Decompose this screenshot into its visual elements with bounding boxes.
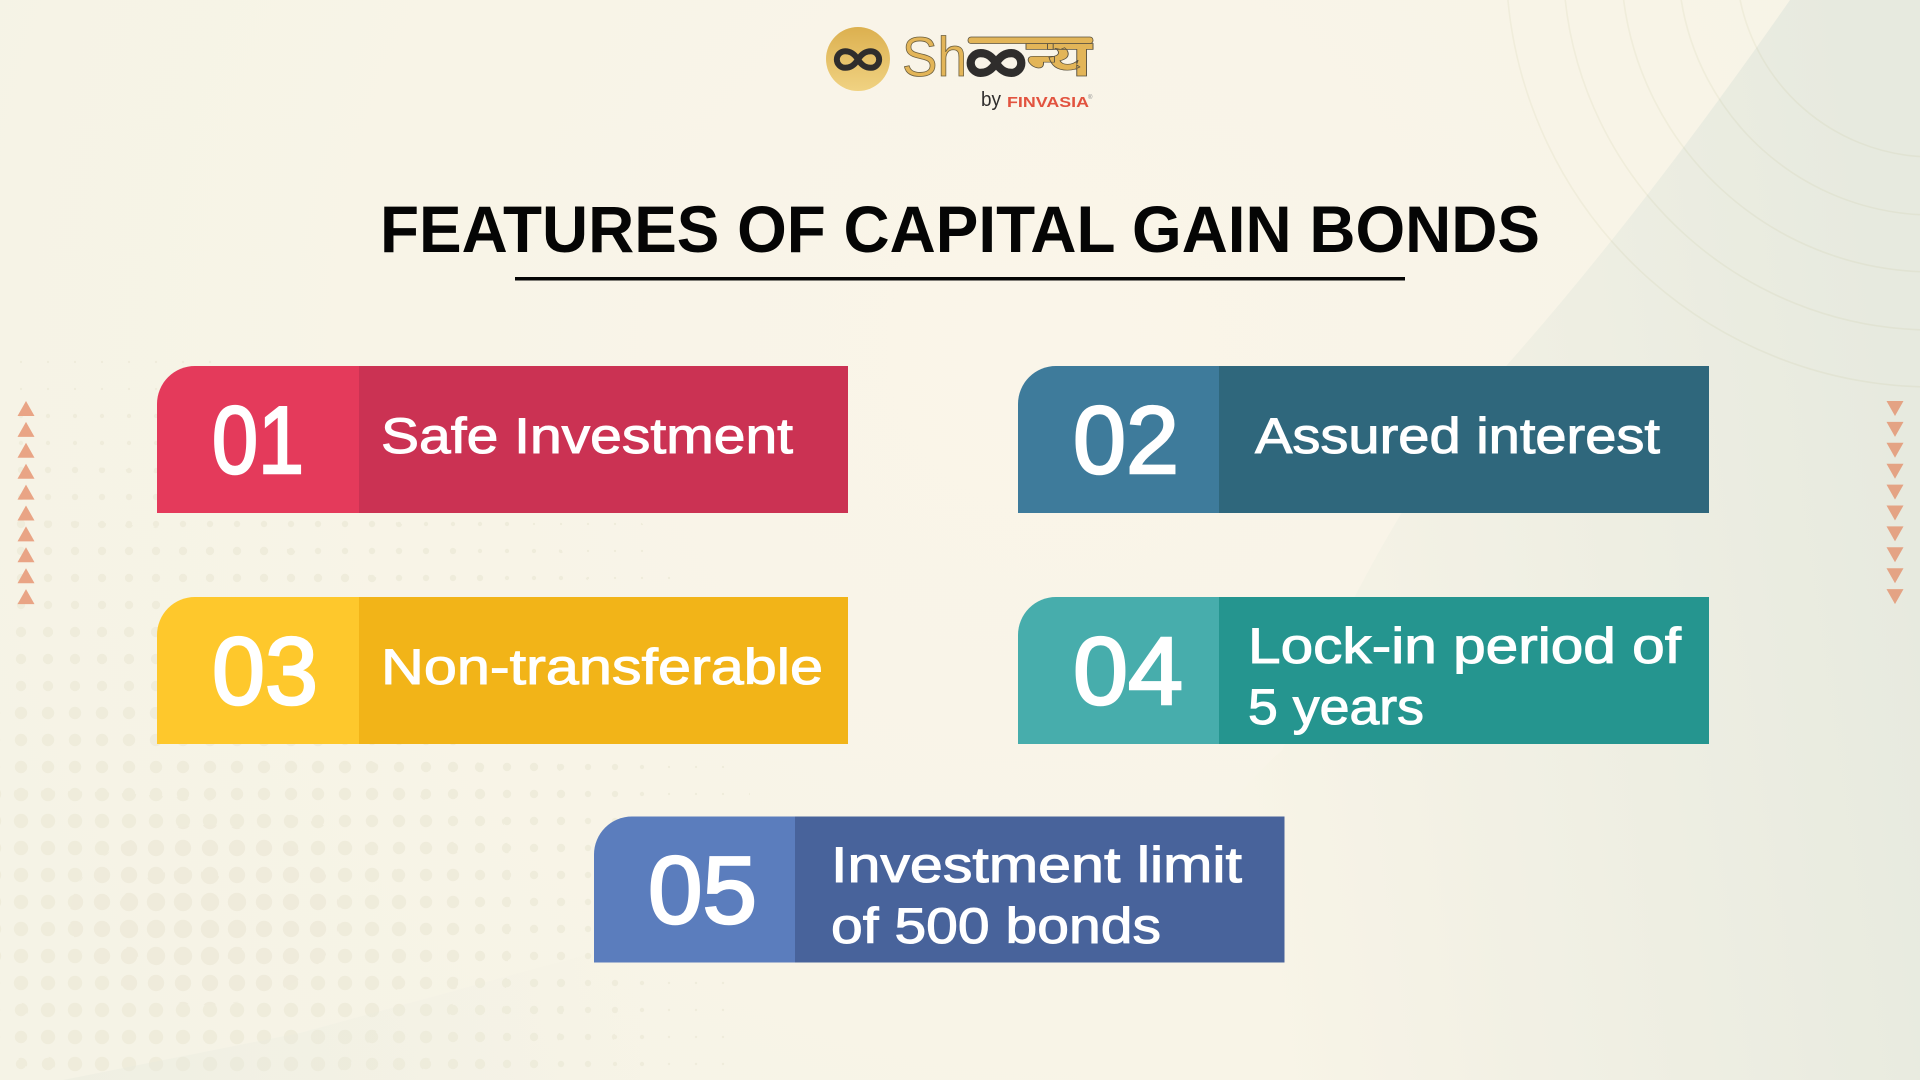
title underline xyxy=(515,277,1405,280)
card 01: Safe Investment xyxy=(157,366,848,513)
card 04: Lock-in period of 5 years: Lock-in period of xyxy=(1248,618,1681,674)
card 03: Non-transferable: Non-transferable xyxy=(381,639,823,695)
icon: gold circle with infinity xyxy=(826,27,890,91)
card 02: Assured interest: 02 xyxy=(1073,387,1179,494)
card 01: Safe Investment: Safe Investment xyxy=(381,408,793,464)
card 03: Non-transferable: 03 xyxy=(212,618,318,725)
card 05: Investment limit of 500 bonds: Investment limit xyxy=(831,837,1242,893)
card 02: Assured interest: Assured interest xyxy=(1255,408,1660,464)
icon: left triangle column xyxy=(18,401,34,604)
card 01: Safe Investment: 01 xyxy=(212,387,304,494)
logo byline xyxy=(981,89,1093,111)
card 04: Lock-in period of 5 years xyxy=(1018,597,1709,744)
logo byline: FINVASIA xyxy=(1007,94,1089,111)
title: FEATURES OF CAPITAL GAIN BONDS xyxy=(380,192,1540,266)
card 05: Investment limit of 500 bonds: 05 xyxy=(648,837,757,944)
card 04: Lock-in period of 5 years: 04 xyxy=(1073,618,1183,725)
logo wordmark xyxy=(902,25,1093,88)
card 05: Investment limit of 500 bonds xyxy=(594,816,1284,962)
logo byline: ® xyxy=(1088,94,1093,101)
logo wordmark: न्य xyxy=(1026,30,1093,88)
card 04: Lock-in period of 5 years: 5 years xyxy=(1248,679,1424,735)
logo: Shoonya by Finvasia xyxy=(826,25,1093,111)
logo wordmark: Sh xyxy=(902,25,967,88)
logo byline: by xyxy=(981,89,1001,111)
card 02: Assured interest xyxy=(1018,366,1709,513)
card 03: Non-transferable xyxy=(157,597,848,744)
icon: right triangle column xyxy=(1886,401,1904,604)
card 05: Investment limit of 500 bonds: of 500 bonds xyxy=(831,898,1161,954)
